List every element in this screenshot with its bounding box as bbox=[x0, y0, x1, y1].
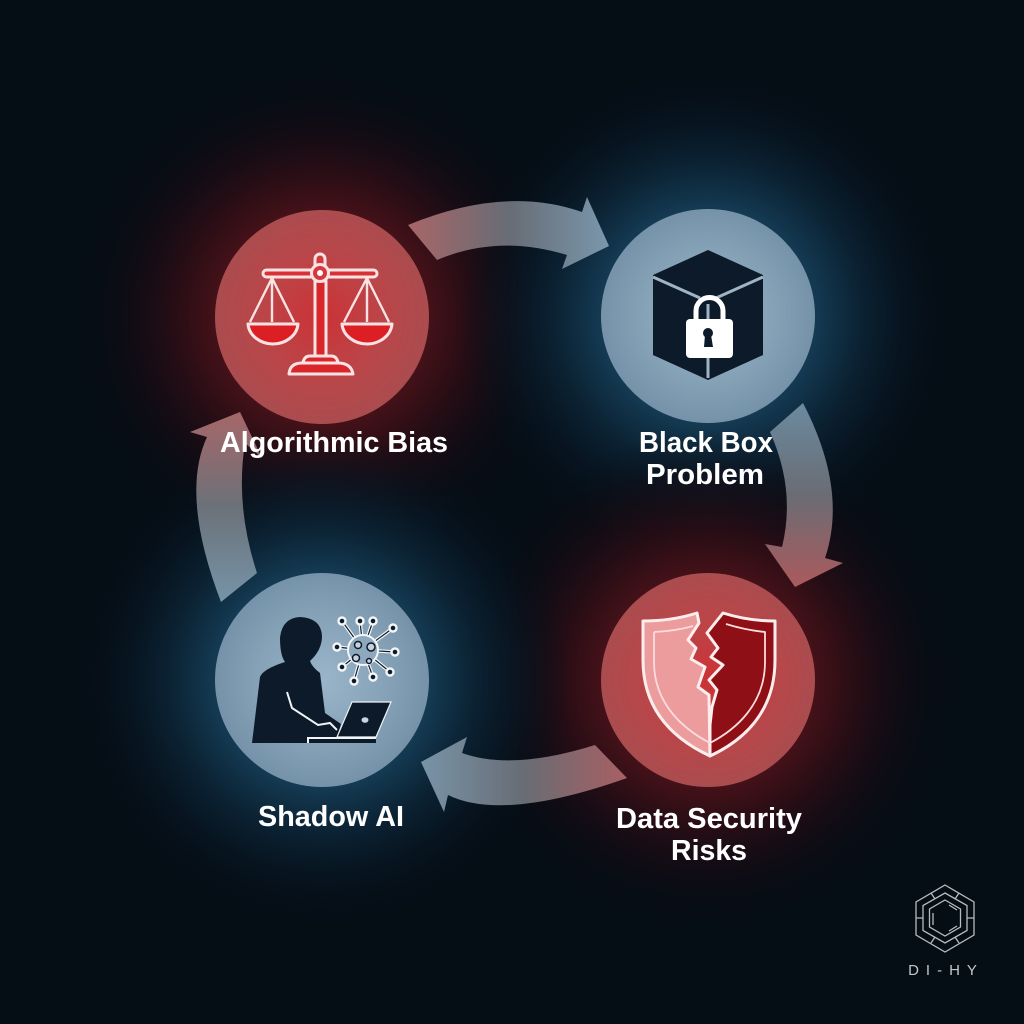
label: Black Box Problem: Black Box bbox=[639, 427, 773, 459]
label: Shadow AI: Shadow AI bbox=[258, 801, 404, 833]
node: Black Box Problem bbox=[601, 209, 815, 423]
icon: broken shield bbox=[643, 613, 775, 756]
arrow: black box to data security bbox=[765, 403, 843, 587]
arrow: data security to shadow AI bbox=[421, 737, 627, 812]
logo: DI-HY: DI-HY bbox=[908, 962, 984, 979]
icon: locked black box bbox=[653, 250, 763, 380]
node: Shadow AI bbox=[215, 573, 429, 787]
glow: red bottom right bbox=[458, 430, 958, 930]
icon: virus bbox=[334, 618, 398, 684]
node: Algorithmic Bias bbox=[215, 210, 429, 424]
logo: DI-HY bbox=[908, 885, 984, 979]
label: Black Box Problem: Problem bbox=[646, 459, 764, 491]
glow: blue bottom left bbox=[72, 430, 572, 930]
arrow: shadow AI to bias bbox=[190, 412, 262, 602]
label: Black Box Problem bbox=[639, 427, 773, 491]
label: Data Security Risks: Data Security bbox=[616, 803, 802, 835]
glow: blue top right bbox=[458, 66, 958, 566]
icon: scales of justice bbox=[248, 254, 392, 374]
icon: person at laptop with virus bbox=[252, 617, 398, 743]
glow: red top left bbox=[72, 67, 572, 567]
label: Data Security Risks: Risks bbox=[671, 835, 747, 867]
label: Data Security Risks bbox=[616, 803, 802, 867]
label: Algorithmic Bias: Algorithmic Bias bbox=[220, 427, 448, 459]
node: Data Security Risks bbox=[601, 573, 815, 787]
arrow: bias to black box bbox=[408, 197, 609, 269]
